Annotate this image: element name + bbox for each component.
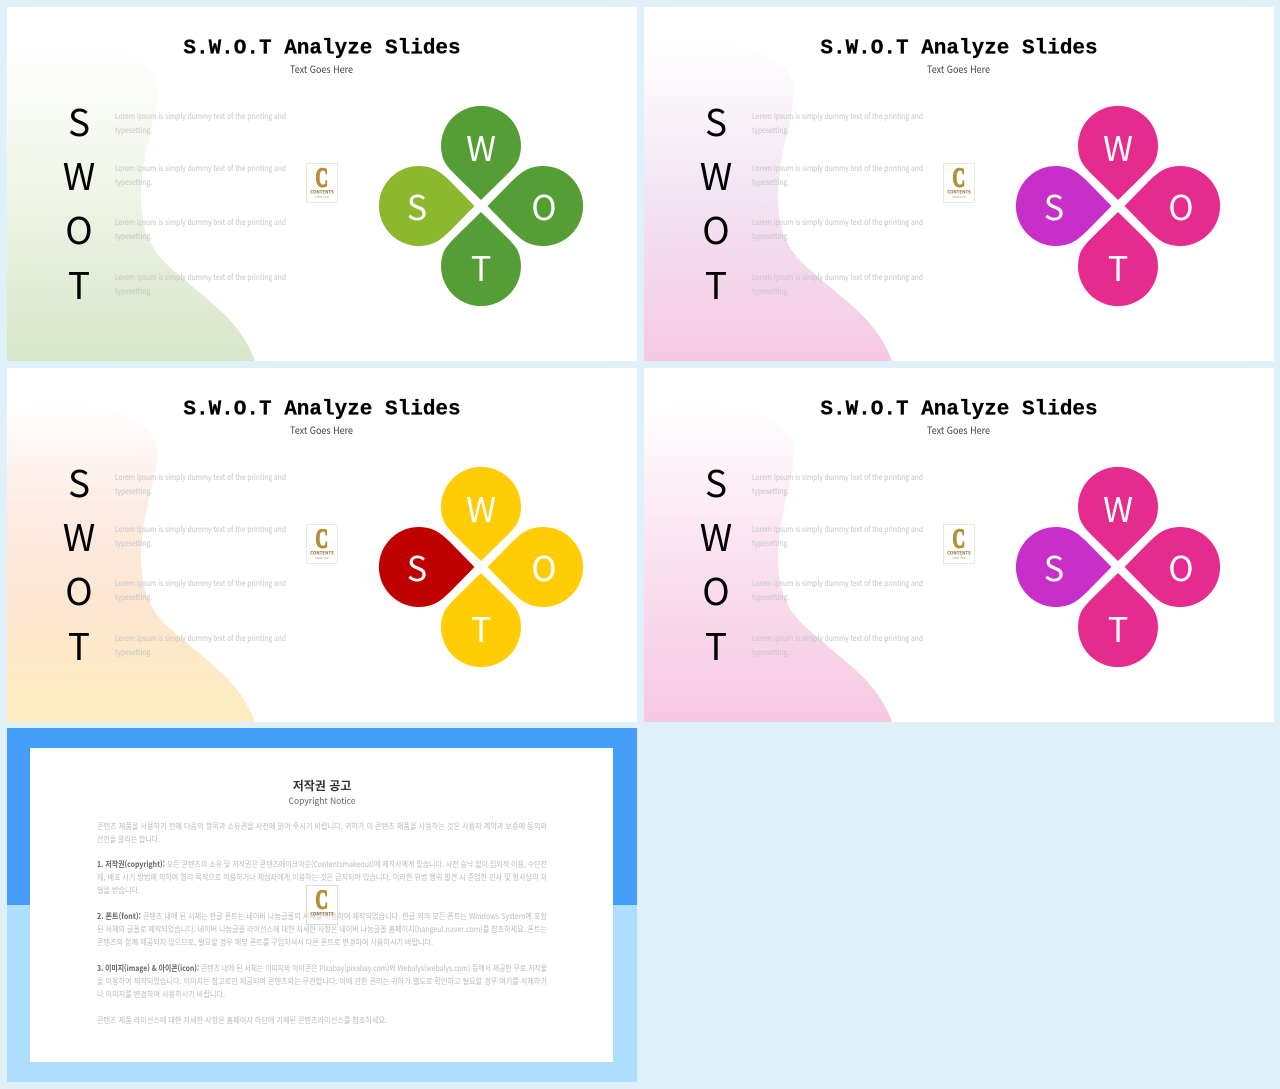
lorem text list: typesetting. [115, 177, 152, 188]
subtitle: Text Goes Here [927, 422, 990, 437]
clover diagram [379, 106, 583, 306]
logo: C [316, 161, 328, 192]
notice body text: 제, 배포 사기 방법에 의하여 영리 목적으로 이용하거나 제삼자에게 이용하는 것은 금지되어 있습니다. 이러한 위법 행위 발견 시 준엄한 민사 및 형사상의 처 [97, 872, 547, 883]
lorem text list: typesetting. [115, 231, 152, 242]
logo: MAKE OUR [952, 556, 966, 560]
vertical SWOT letters: S [68, 454, 90, 508]
lorem text list: typesetting. [115, 538, 152, 549]
lorem text list: Lorem Ipsum is simply dummy text of the printing and [752, 472, 923, 483]
lorem text list: typesetting. [752, 592, 789, 603]
background wave [7, 404, 255, 722]
vertical SWOT letters: W [700, 508, 732, 562]
logo: C [316, 883, 328, 914]
clover diagram: W [466, 483, 496, 532]
lorem text list: Lorem Ipsum is simply dummy text of the printing and [752, 524, 923, 535]
panel: SWOT slide green [7, 7, 637, 361]
logo: CONTENTS [310, 550, 334, 556]
notice body text: 콘텐츠 제품 라이선스에 대한 자세한 사항은 홈페이지 하단에 기재된 콘텐츠라이선스를 참조하세요. [97, 1015, 387, 1026]
logo: MAKE OUR [315, 195, 329, 199]
notice body text: 3. 이미지(image) & 아이콘(icon): 콘텐츠 내에 된 서체는 이미지와 아이콘은 Pixabay(pixabay.com)와 Webalys(webalys.com) 등에서 제공한 무료 저작물 [97, 963, 547, 974]
panel: SWOT slide magenta top [644, 7, 1274, 361]
clover diagram: O [531, 542, 557, 591]
logo [944, 161, 974, 202]
lorem text list: Lorem Ipsum is simply dummy text of the printing and [115, 472, 286, 483]
subtitle: Text Goes Here [290, 422, 353, 437]
lorem text list: Lorem Ipsum is simply dummy text of the printing and [115, 633, 286, 644]
lorem text list: Lorem Ipsum is simply dummy text of the printing and [115, 217, 286, 228]
vertical SWOT letters: S [68, 93, 90, 147]
vertical SWOT letters [63, 93, 95, 310]
vertical SWOT letters: T [68, 256, 90, 310]
vertical SWOT letters: T [705, 617, 727, 671]
lorem text list: typesetting. [752, 647, 789, 658]
vertical SWOT letters: S [705, 93, 727, 147]
lorem text list: Lorem Ipsum is simply dummy text of the printing and [752, 111, 923, 122]
vertical SWOT letters [700, 454, 732, 671]
clover diagram [1016, 106, 1220, 306]
logo: CONTENTS [310, 912, 334, 918]
notice body text: 1. 저작권(copyright): 모든 콘텐츠의 소유 및 저작권은 콘텐츠메이크아웃(Contentsmakeout)에 제작사에게 있습니다. 사전 승낙 없이 임의적 이용, 수단전 [97, 859, 547, 870]
clover diagram: S [1044, 542, 1064, 591]
vertical SWOT letters: O [65, 562, 93, 616]
panel: SWOT slide magenta bottom [644, 368, 1274, 722]
notice body text: 콘텐츠 제품을 사용하기 전에 다음의 항목과 소유권을 사전에 읽어 주시기 바랍니다. 귀하가 이 콘텐츠 제품을 사용하는 것은 사용자 계약과 보증에 동의와 [97, 821, 548, 832]
lorem text list: typesetting. [752, 486, 789, 497]
logo: C [952, 161, 965, 192]
lorem text list [115, 111, 286, 297]
clover diagram: T [471, 603, 491, 652]
subtitle: Text Goes Here [927, 61, 990, 76]
clover diagram: W [1103, 122, 1133, 171]
logo [944, 522, 974, 564]
lorem text list: Lorem Ipsum is simply dummy text of the printing and [752, 217, 923, 228]
clover diagram: T [471, 242, 491, 291]
logo: CONTENTS [947, 190, 971, 196]
notice body text [97, 821, 548, 1026]
logo: MAKE OUR [952, 195, 966, 199]
notice body text: 된 서체의 글꼴로 제작되었습니다. 네이버 나눔글꼴 라이선스에 대한 자세한 사항은 네이버 나눔글꼴 홈페이지(hangeul.naver.com)를 참조하세요. 폰트는 [97, 924, 547, 935]
logo [306, 883, 338, 924]
logo: C [952, 522, 965, 553]
clover diagram: T [1108, 242, 1128, 291]
notice body text: 2. 폰트(font): 콘텐츠 내에 된 서체는 한글 폰트는 네이버 나눔글꼴의 서체를 사용하여 제작되었습니다. 한글 외의 모든 폰트는 Windows System에 포함 [97, 911, 548, 922]
lorem text list: typesetting. [752, 231, 789, 242]
vertical SWOT letters: O [702, 562, 730, 616]
subtitle: Text Goes Here [290, 61, 353, 76]
title: S.W.O.T Analyze Slides [183, 38, 461, 60]
notice body text: 선언을 알리는 합니다. [97, 834, 160, 845]
vertical SWOT letters: W [63, 508, 95, 562]
lorem text list: typesetting. [752, 125, 789, 136]
clover diagram: O [531, 181, 557, 230]
lorem text list: Lorem Ipsum is simply dummy text of the printing and [752, 163, 923, 174]
lorem text list [752, 111, 923, 297]
lorem text list: Lorem Ipsum is simply dummy text of the printing and [752, 272, 923, 283]
logo: MAKE OUR [315, 556, 329, 560]
notice subheading: Copyright Notice [289, 795, 356, 807]
vertical SWOT letters: T [705, 256, 727, 310]
notice heading: 저작권 공고 [293, 777, 351, 794]
logo: CONTENTS [947, 550, 971, 556]
lorem text list: Lorem Ipsum is simply dummy text of the printing and [115, 111, 286, 122]
panel: SWOT slide yellow [7, 368, 637, 722]
logo: C [316, 522, 328, 553]
lorem text list: typesetting. [752, 538, 789, 549]
background wave [644, 43, 892, 361]
lorem text list: typesetting. [752, 177, 789, 188]
lorem text list: Lorem Ipsum is simply dummy text of the printing and [115, 578, 286, 589]
lorem text list: Lorem Ipsum is simply dummy text of the printing and [115, 272, 286, 283]
title: S.W.O.T Analyze Slides [183, 398, 461, 422]
clover diagram: W [1103, 483, 1133, 532]
background wave [7, 43, 255, 361]
vertical SWOT letters: W [63, 147, 95, 201]
notice body text: 나 이미지를 변경하여 사용하시기 바랍니다. [97, 989, 225, 1000]
clover diagram: T [1108, 603, 1128, 652]
lorem text list: Lorem Ipsum is simply dummy text of the printing and [752, 578, 923, 589]
vertical SWOT letters: T [68, 617, 90, 671]
vertical SWOT letters [700, 93, 732, 310]
clover diagram: S [407, 181, 427, 230]
lorem text list: typesetting. [752, 286, 789, 297]
vertical SWOT letters: W [700, 147, 732, 201]
lorem text list: typesetting. [115, 592, 152, 603]
notice body text: 벌을 받습니다. [97, 885, 140, 896]
clover diagram [379, 467, 583, 667]
lorem text list: typesetting. [115, 486, 152, 497]
logo [306, 522, 338, 564]
lorem text list [752, 472, 923, 658]
lorem text list: typesetting. [115, 647, 152, 658]
title: S.W.O.T Analyze Slides [820, 398, 1098, 422]
lorem text list: Lorem Ipsum is simply dummy text of the printing and [115, 163, 286, 174]
notice body text: 콘텐츠의 함께 제공되지 않으므로, 필요할 경우 해당 폰트를 구입하셔서 다른 폰트로 변경하여 사용하시기 바랍니다. [97, 937, 433, 948]
background wave [644, 404, 892, 722]
panel: copyright notice [7, 728, 637, 1082]
notice body text: 을 이용하여 제작되었습니다. 이미지는 참고로만 제공되며 콘텐츠와는 무관합니다. 이에 관한 권리는 귀하가 별도로 확인하고 필요할 경우 여기를 삭제하거 [97, 976, 547, 987]
clover diagram: S [407, 542, 427, 591]
lorem text list [115, 472, 286, 658]
vertical SWOT letters [63, 454, 95, 671]
clover diagram: S [1044, 181, 1064, 230]
clover diagram: O [1168, 181, 1194, 230]
clover diagram [1016, 467, 1220, 667]
vertical SWOT letters: O [702, 201, 730, 255]
title: S.W.O.T Analyze Slides [820, 38, 1098, 60]
lorem text list: typesetting. [115, 286, 152, 297]
logo: CONTENTS [310, 190, 334, 196]
clover diagram: O [1168, 542, 1194, 591]
logo [306, 161, 338, 202]
lorem text list: Lorem Ipsum is simply dummy text of the printing and [752, 633, 923, 644]
vertical SWOT letters: O [65, 201, 93, 255]
vertical SWOT letters: S [705, 454, 727, 508]
lorem text list: typesetting. [115, 125, 152, 136]
clover diagram: W [466, 122, 496, 171]
lorem text list: Lorem Ipsum is simply dummy text of the printing and [115, 524, 286, 535]
